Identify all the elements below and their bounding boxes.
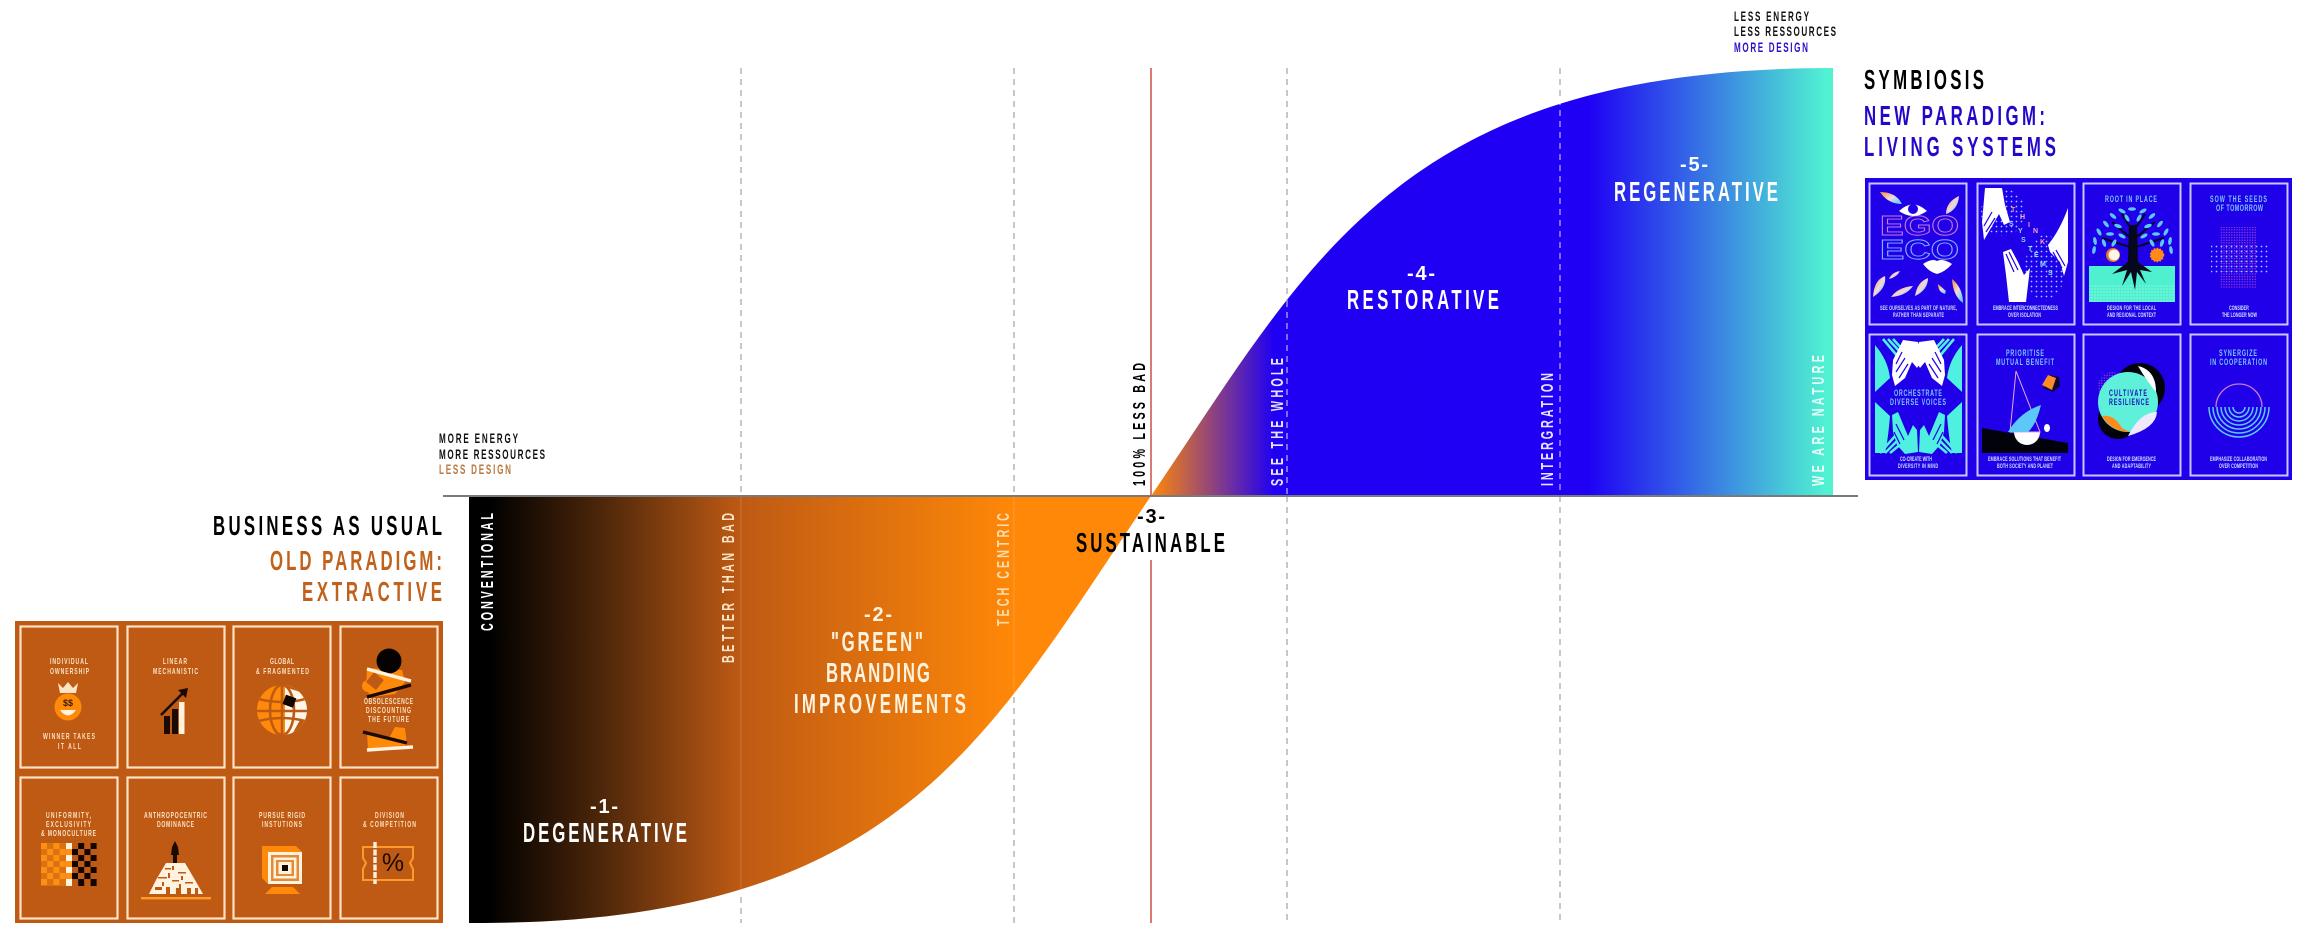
card: winner takes it all: WINNER TAKES [43, 733, 95, 741]
icon: crowned face [54, 682, 82, 720]
card: root in place: ROOT IN PLACE [2105, 194, 2157, 204]
icon: eye [1899, 204, 1927, 216]
stage 5: regenerative [1614, 154, 1778, 207]
icon: balance with feather [1982, 371, 2068, 453]
heading: old paradigm extractive: OLD PARADIGM: [270, 545, 442, 576]
card: winner takes it all: INDIVIDUAL [50, 658, 89, 666]
card: anthropocentric: DOMINANCE [157, 821, 194, 829]
card: obsolescence [340, 626, 438, 768]
scattered letters: T [2028, 246, 2033, 253]
card: root in place: AND REGIONAL CONTEXT [2107, 312, 2157, 319]
icon: half circle and ripples [2209, 384, 2269, 437]
icon: bar chart with arrow [161, 688, 188, 734]
card: prioritise mutual benefit: MUTUAL BENEFIT [1996, 357, 2054, 367]
stage 3: sustainable [1076, 506, 1225, 558]
card: ego to eco: RATHER THAN SEPARATE [1893, 312, 1944, 319]
chart: design curve area [443, 68, 1858, 923]
card: global fragmented [234, 626, 330, 768]
card: obsolescence: DISCOUNTING [366, 707, 411, 715]
note: less energy, less ressources, more design: LESS RESSOURCES [1734, 25, 1836, 40]
scattered letters: T [2011, 207, 2016, 214]
stage 5: regenerative: REGENERATIVE [1614, 176, 1778, 207]
note: more energy, more ressources, less design [439, 432, 545, 478]
note: less energy, less ressources, more design: MORE DESIGN [1734, 41, 1808, 56]
card: obsolescence: OBSOLESCENCE [364, 698, 413, 706]
note: more energy, more ressources, less design: MORE ENERGY [439, 432, 518, 447]
card: global fragmented: GLOBAL [270, 658, 295, 666]
heading: old paradigm extractive [270, 545, 442, 607]
card: division competition: DIVISION [375, 812, 404, 820]
card: winner takes it all: OWNERSHIP [50, 668, 89, 676]
card: interconnectedness: EMBRACE INTERCONNECTEDNESS [1993, 305, 2058, 312]
panel: old paradigm cards [15, 621, 443, 923]
label: intergration: INTERGRATION [1538, 373, 1558, 486]
icon: falling stack [362, 648, 413, 750]
card: orchestrate diverse voices: DIVERSE VOICES [1890, 397, 1946, 407]
card: linear mechanistic: LINEAR [163, 658, 187, 666]
note: less energy, less ressources, more design: LESS ENERGY [1734, 10, 1809, 25]
label: conventional: CONVENTIONAL [478, 513, 498, 631]
card: synergize in cooperation: IN COOPERATION [2210, 357, 2267, 367]
card: cultivate resilience: CULTIVATE [2109, 388, 2147, 398]
card: linear mechanistic [128, 626, 224, 768]
card: root in place: DESIGN FOR THE LOCAL [2107, 305, 2156, 312]
stage 1: degenerative: -1- [590, 796, 618, 818]
label: we are nature: WE ARE NATURE [1809, 355, 1829, 486]
scattered letters: S [2048, 270, 2053, 277]
stage 4: restorative: -4- [1407, 263, 1435, 285]
card: synergize in cooperation: OVER COMPETITION [2219, 463, 2258, 470]
icon: mirrored hands [1875, 339, 1962, 454]
card: winner takes it all [20, 626, 118, 768]
label: tech centric: TECH CENTRIC [994, 513, 1014, 626]
card: orchestrate diverse voices: CO-CREATE WITH [1900, 456, 1932, 463]
card: cultivate resilience [2084, 334, 2180, 476]
card: sow the seeds: THE LONGER NOW [2222, 312, 2257, 319]
icon: lips [1923, 260, 1952, 274]
icon: monitor of concentric squares [262, 846, 302, 894]
panel: new paradigm cards [1865, 178, 2292, 480]
icon: human atop animal pile [141, 841, 211, 899]
note: less energy, less ressources, more design [1734, 10, 1836, 56]
scattered letters: S [2021, 237, 2026, 244]
stage 1: degenerative [523, 796, 687, 848]
icon: seed dot field [2211, 227, 2269, 289]
card: prioritise mutual benefit: EMBRACE SOLUTIONS THAT BENEFIT [1988, 456, 2062, 463]
note: more energy, more ressources, less design: MORE RESSOURCES [439, 448, 545, 463]
stage 1: degenerative: DEGENERATIVE [523, 817, 687, 848]
icon: crowned face: $$ [63, 698, 73, 708]
stage 3: sustainable: SUSTAINABLE [1076, 527, 1225, 558]
card: global fragmented: & FRAGMENTED [256, 668, 309, 676]
card: interconnectedness: OVER ISOLATION [2008, 312, 2041, 319]
heading: new paradigm living systems [1864, 100, 2056, 162]
scattered letters: I [2028, 222, 2030, 229]
card: linear mechanistic: MECHANISTIC [153, 668, 198, 676]
card: obsolescence: THE FUTURE [368, 716, 409, 724]
card: ego to eco [1870, 184, 1966, 324]
scattered letters: N [2033, 228, 2038, 235]
card: ego to eco: SEE OURSELVES AS PART OF NATURE, [1880, 305, 1957, 312]
card: prioritise mutual benefit [1978, 334, 2074, 476]
card: pursue rigid institutions [234, 778, 330, 918]
dots [1981, 188, 2025, 236]
card: cultivate resilience: DESIGN FOR EMERGENCE [2107, 456, 2156, 463]
stage 2: green branding improvements: IMPROVEMENTS [794, 688, 966, 719]
note: more energy, more ressources, less design: LESS DESIGN [439, 463, 511, 478]
card: sow the seeds: CONSIDER [2229, 305, 2249, 312]
icon: checkerboard [41, 843, 97, 886]
heading: symbiosis: SYMBIOSIS [1864, 64, 1984, 95]
stage 4: restorative [1347, 263, 1499, 315]
stage 5: regenerative: -5- [1680, 154, 1708, 176]
heading: new paradigm living systems: LIVING SYSTEMS [1864, 131, 2056, 162]
card: sow the seeds [2190, 184, 2288, 324]
text: EGO: EGO [1880, 210, 1959, 241]
card: sow the seeds: OF TOMORROW [2216, 203, 2263, 213]
stage 2: green branding improvements: "GREEN" [831, 626, 923, 657]
stage 3: sustainable: -3- [1137, 506, 1165, 528]
icon: fragmented globe [257, 685, 307, 735]
text: ECO: ECO [1880, 234, 1959, 265]
card: synergize in cooperation: EMPHASIZE COLLABORATION [2210, 456, 2267, 463]
heading: business as usual: BUSINESS AS USUAL [213, 510, 442, 541]
stage 2: green branding improvements: BRANDING [826, 657, 930, 688]
card: division competition [340, 778, 438, 918]
label: see the whole: SEE THE WHOLE [1268, 358, 1288, 486]
card: orchestrate diverse voices [1870, 334, 1966, 476]
scattered letters: H [2020, 214, 2025, 221]
card: uniformity: & MONOCULTURE [41, 830, 96, 838]
scattered letters: S [2009, 221, 2014, 228]
scattered letters: M [2040, 261, 2046, 268]
stage 4: restorative: RESTORATIVE [1347, 284, 1499, 315]
stage 2: green branding improvements: -2- [864, 604, 892, 626]
card: interconnectedness [1978, 184, 2074, 324]
card: prioritise mutual benefit: BOTH SOCIETY AND PLANET [1997, 463, 2054, 470]
stage 2: green branding improvements [794, 604, 966, 719]
card: anthropocentric [128, 778, 224, 918]
card: uniformity [20, 778, 118, 918]
card: orchestrate diverse voices: ORCHESTRATE [1894, 388, 1942, 398]
card: pursue rigid institutions: PURSUE RIGID [259, 812, 305, 820]
scattered letters: K [2040, 239, 2045, 246]
card: uniformity: EXCLUSIVITY [46, 821, 91, 829]
card: root in place [2084, 184, 2180, 324]
icon: discount ticket [363, 842, 413, 884]
icon: leaves [1873, 192, 1963, 303]
heading: new paradigm living systems: NEW PARADIGM: [1864, 100, 2045, 131]
heading: old paradigm extractive: EXTRACTIVE [302, 576, 442, 607]
card: orchestrate diverse voices: DIVERSITY IN MIND [1898, 463, 1938, 470]
icon: resilience circle [2098, 363, 2165, 439]
icon: tree [2089, 207, 2175, 302]
scattered letters [2009, 207, 2053, 277]
card: division competition: & COMPETITION [363, 821, 416, 829]
card: pursue rigid institutions: INSTUTIONS [262, 821, 302, 829]
label: 100% less bad: 100% LESS BAD [1130, 363, 1150, 486]
card: cultivate resilience: AND ADAPTABILITY [2112, 463, 2151, 470]
card: synergize in cooperation [2190, 334, 2288, 476]
card: synergize in cooperation: SYNERGIZE [2219, 348, 2257, 358]
scattered letters: E [2034, 252, 2039, 259]
card: sow the seeds: SOW THE SEEDS [2210, 194, 2267, 204]
card: uniformity: UNIFORMITY, [46, 812, 91, 820]
card: prioritise mutual benefit: PRIORITISE [2006, 348, 2044, 358]
icon: discount ticket: % [382, 849, 404, 877]
card: cultivate resilience: RESILIENCE [2109, 397, 2149, 407]
label: better than bad: BETTER THAN BAD [719, 513, 739, 663]
card: winner takes it all: IT ALL [58, 743, 82, 751]
icon: hands [1982, 188, 2068, 302]
scattered letters: Y [2018, 228, 2023, 235]
card: anthropocentric: ANTHROPOCENTRIC [144, 812, 207, 820]
